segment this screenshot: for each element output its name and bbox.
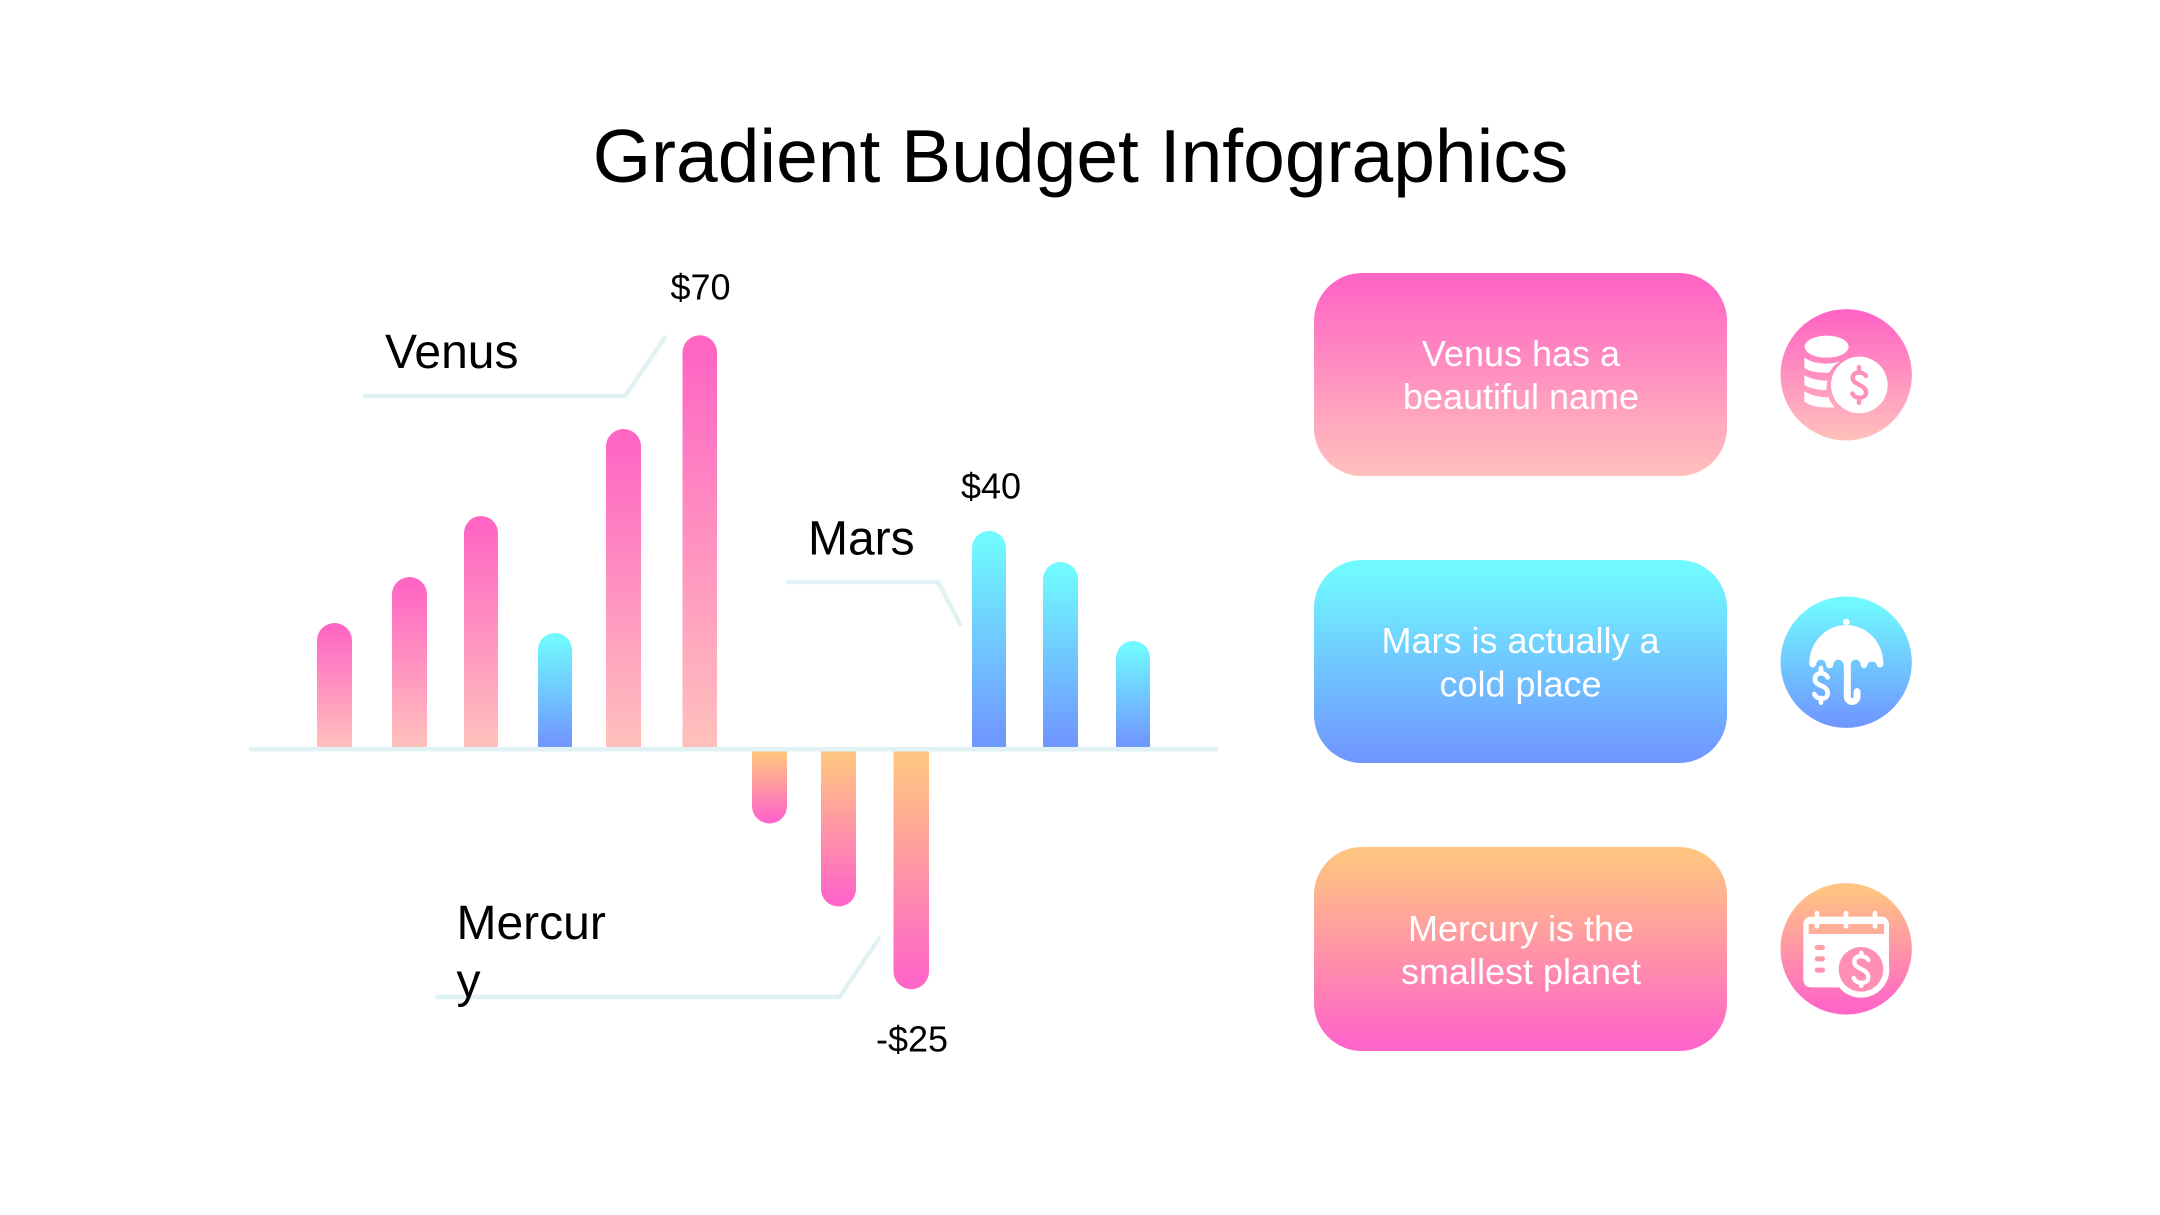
bar 3: [464, 516, 498, 747]
Mercury card text: Mercury is the: [1408, 908, 1634, 949]
Mercury value: -$25: [876, 1018, 948, 1060]
bar 10: [972, 531, 1006, 747]
callout: Mars: [786, 466, 1021, 626]
Mars card text: Mars is actually a: [1381, 620, 1661, 661]
Mars label: Mars: [808, 512, 915, 566]
callout: Mercury: [436, 897, 948, 1060]
bar 9: [894, 752, 929, 989]
bar 5: [606, 429, 641, 747]
Venus leader line: [363, 336, 666, 396]
Venus value: $70: [670, 266, 731, 308]
bar 7: [752, 752, 787, 824]
icon: calendar: [1780, 883, 1912, 1014]
bar 8: [821, 752, 856, 906]
Venus card text: Venus has a: [1422, 333, 1621, 374]
Mars leader line: [786, 582, 961, 626]
bar 2: [392, 577, 427, 747]
bar 12: [1116, 641, 1150, 747]
bar 4: [538, 633, 572, 747]
Venus card text: beautiful name: [1403, 376, 1639, 417]
panel: Mercury card: [1314, 847, 1727, 1051]
panel: Mars card: [1314, 560, 1727, 763]
title: Gradient Budget Infographics: [593, 114, 1568, 198]
Mars value: $40: [961, 466, 1021, 506]
Mercury leader line: [436, 937, 880, 997]
icon: umbrella: [1780, 596, 1912, 728]
Mars card text: cold place: [1439, 664, 1602, 704]
Mercury label: Mercur: [456, 897, 606, 950]
Venus label: Venus: [385, 326, 518, 379]
Mercury card text: smallest planet: [1401, 951, 1641, 992]
axis line: [249, 747, 1218, 752]
bar 1: [317, 623, 352, 747]
bar 11: [1043, 562, 1078, 747]
callout: Venus: [363, 266, 731, 396]
bar chart: [249, 335, 1218, 989]
bar 6: [682, 335, 717, 747]
Mercury label: y: [456, 955, 480, 1008]
icon: coins: [1780, 309, 1912, 440]
panel: Venus card: [1314, 273, 1727, 476]
